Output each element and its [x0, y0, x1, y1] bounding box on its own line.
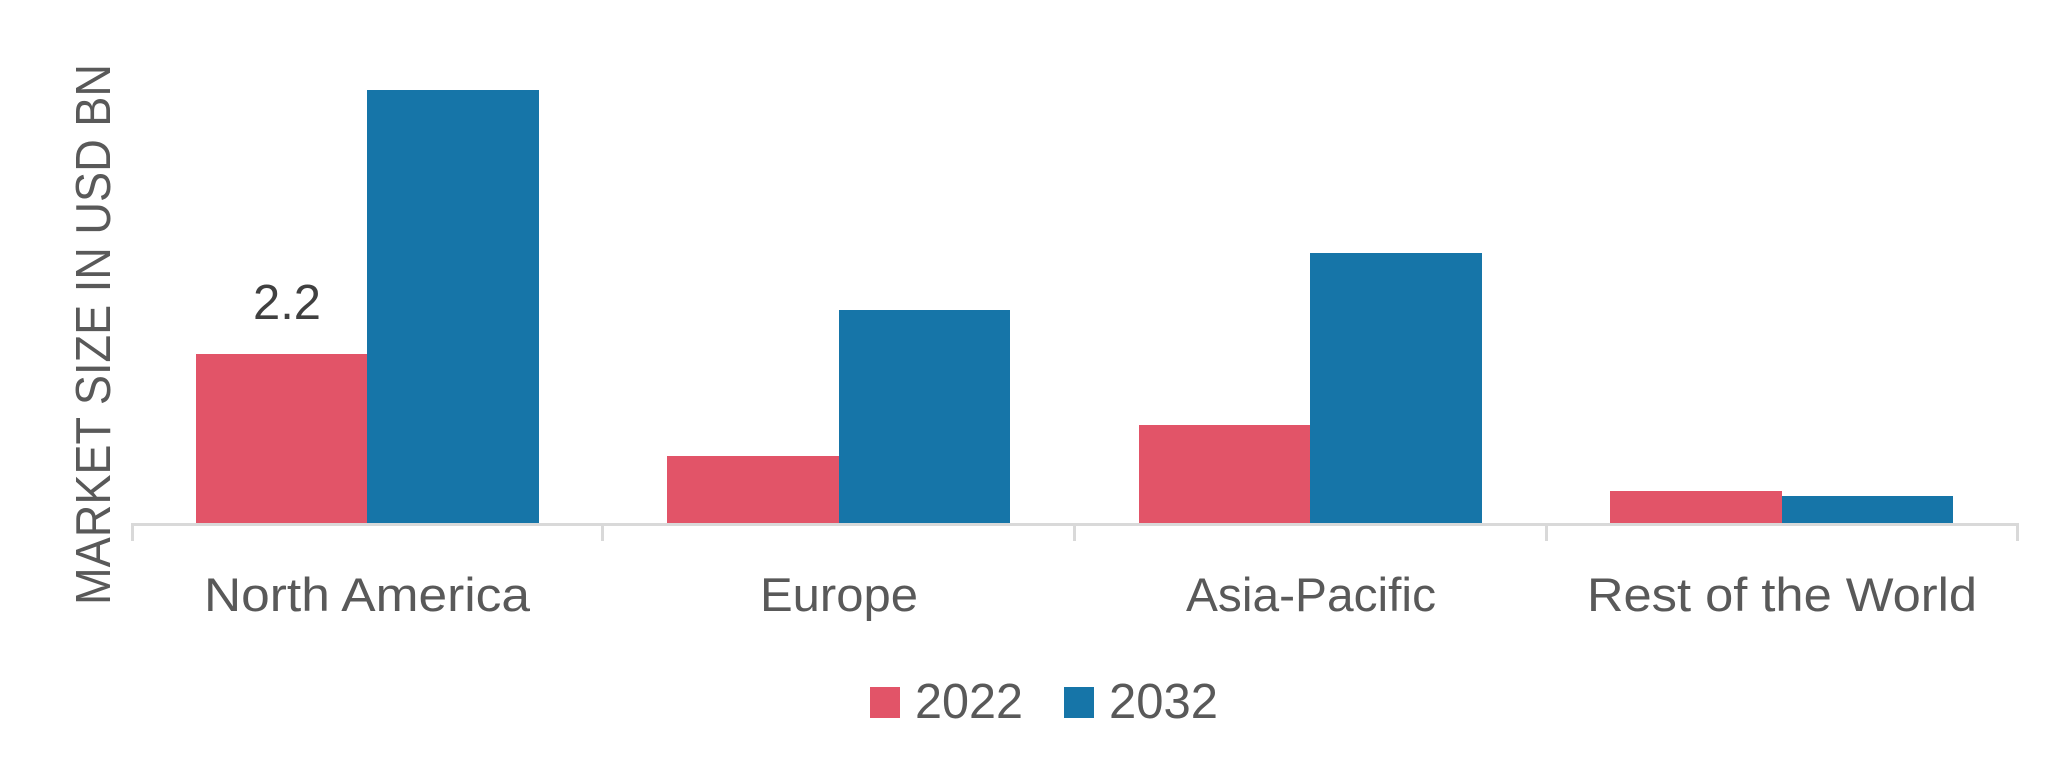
category label: Asia-Pacific: Asia-Pacific: [1186, 568, 1436, 621]
bars: Asia-Pacific: [1139, 253, 1482, 523]
bars: Europe: [667, 310, 1010, 523]
x axis line with ticks: [131, 523, 2019, 541]
category label: Rest of the World: Rest of the World: [1587, 568, 1977, 621]
y axis title: MARKET SIZE IN USD BN: [67, 64, 121, 605]
bars: Rest of the World: [1610, 491, 1953, 523]
category label: North America: North America: [204, 568, 531, 621]
legend swatch: 2032: [1064, 687, 1094, 718]
legend label: 2032: 2032: [1109, 675, 1218, 729]
legend: [870, 675, 1218, 729]
legend label: 2022: 2022: [915, 675, 1023, 729]
data label: North America 2022: 2.2: [253, 276, 321, 330]
legend swatch: 2022: [870, 687, 900, 718]
bars: North America: [196, 90, 539, 523]
category label: Europe: Europe: [760, 568, 918, 621]
